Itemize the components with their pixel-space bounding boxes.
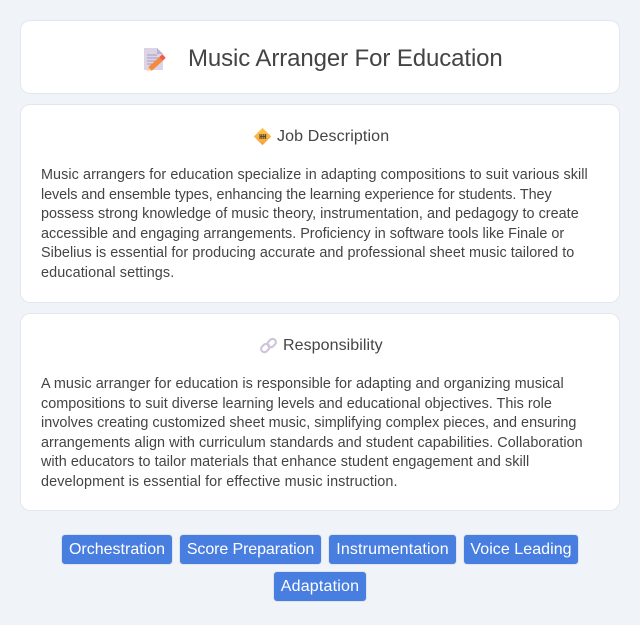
job description text block: levels and ensemble types, enhancing the learning experience for students. They <box>41 186 552 202</box>
job description text block: Music arrangers for education specialize in adapting compositions to suit various skill <box>41 167 588 183</box>
tag: Score Preparation: Score Preparation <box>187 541 314 558</box>
title: Music Arranger For Education <box>188 45 503 72</box>
icon: diamond sign <box>254 128 271 145</box>
job description text block: Sibelius is essential for producing accurate and professional sheet music tailored to <box>41 245 574 261</box>
panel: title card <box>20 20 620 94</box>
tag: Adaptation <box>273 571 367 602</box>
tag: Voice Leading <box>463 534 579 565</box>
responsibility text block: with educators to tailor materials that enhance student engagement and skill <box>41 454 529 470</box>
icon: document with pencil <box>144 48 166 71</box>
job description text block <box>41 167 588 280</box>
job description text block: possess strong knowledge of music theory, instrumentation, and pedagogy to create <box>41 206 579 222</box>
panel: responsibility <box>20 313 620 511</box>
responsibility text block: development is essential for effective music instruction. <box>41 474 398 490</box>
responsibility text block: arrangements align with curriculum standards and student capabilities. Collaboration <box>41 434 583 450</box>
panel: job description <box>20 104 620 303</box>
tag: Adaptation: Adaptation <box>281 578 359 595</box>
job description text block: educational settings. <box>41 264 174 280</box>
tag: Score Preparation <box>179 534 322 565</box>
tag: Instrumentation: Instrumentation <box>336 541 449 558</box>
tag: Voice Leading: Voice Leading <box>470 541 572 558</box>
responsibility text block <box>41 376 583 490</box>
responsibility text block: A music arranger for education is responsible for adapting and organizing musical <box>41 376 564 392</box>
responsibility text block: compositions to suit diverse learning levels and educational objectives. This role <box>41 396 552 412</box>
heading: job description: Job Description <box>277 128 389 145</box>
heading: responsibility: Responsibility <box>283 337 383 354</box>
job description text block: accessible and engaging arrangements. Proficiency in software tools like Finale or <box>41 226 564 242</box>
tag: Instrumentation <box>328 534 457 565</box>
tag: Orchestration <box>61 534 173 565</box>
responsibility text block: involves creating customized sheet music, simplifying complex pieces, and ensuring <box>41 415 576 431</box>
icon: chain link <box>260 338 277 354</box>
tag: Orchestration: Orchestration <box>69 541 165 558</box>
skill tags <box>61 534 579 602</box>
